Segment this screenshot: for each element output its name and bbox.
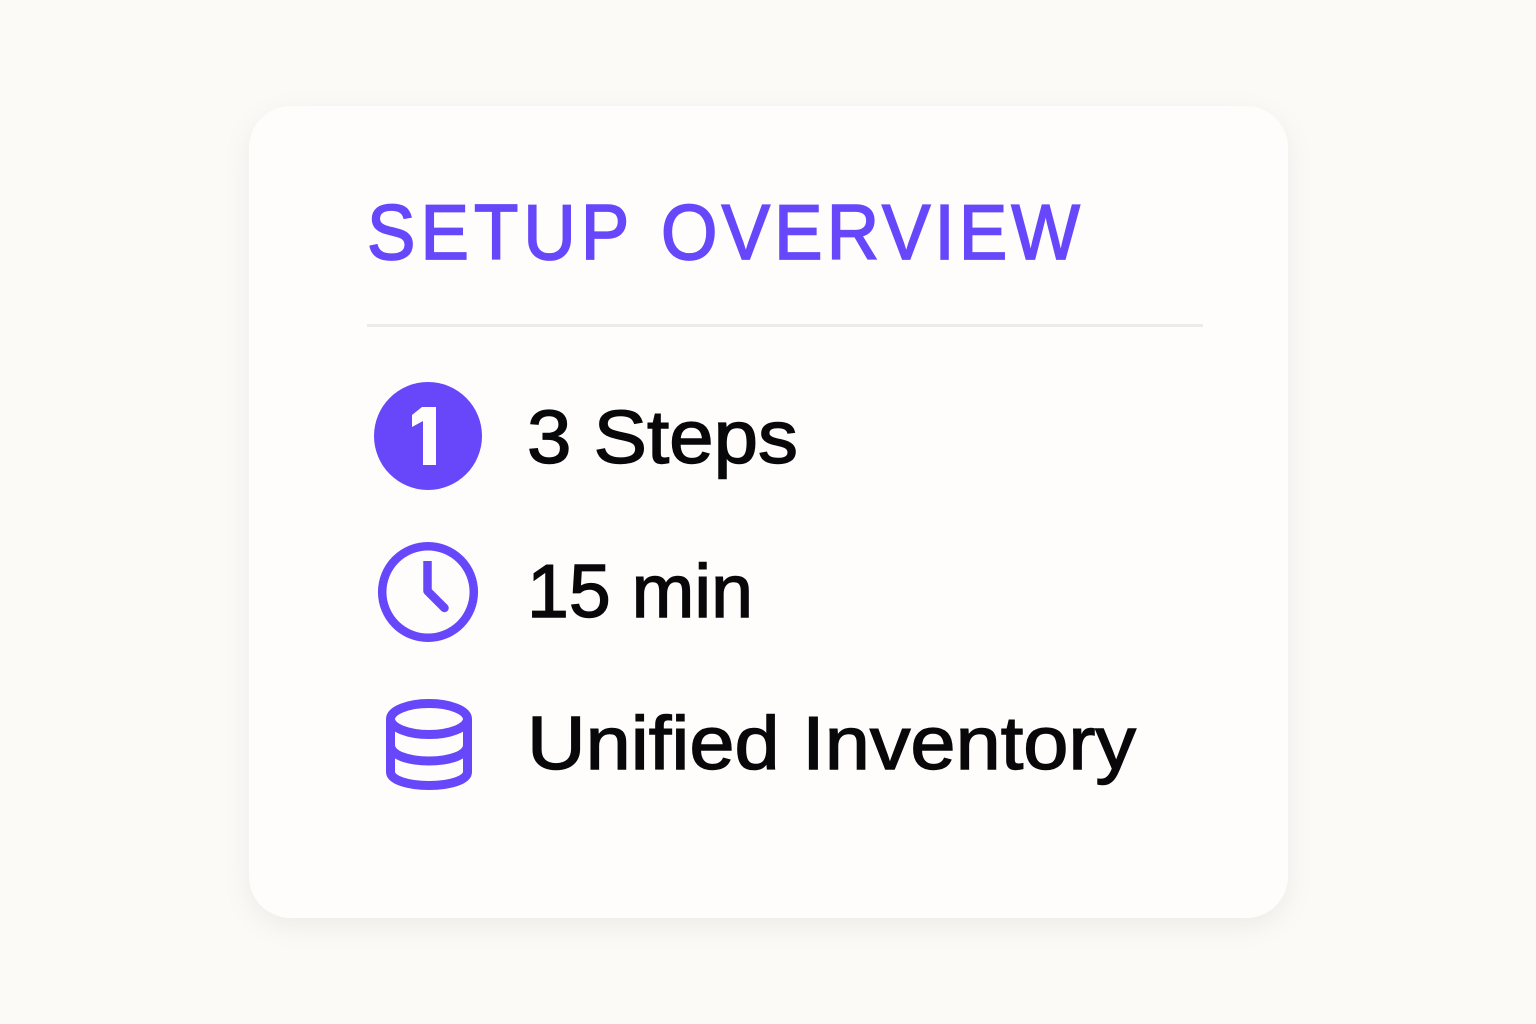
text: 15 min: 15 min [527,549,753,633]
panel: setup overview card [249,106,1288,918]
heading: setup overview [367,189,1084,276]
icon: clock [382,546,474,638]
icon: numbered circle [374,382,482,490]
text: unified inventory: Unified Inventory [527,701,1137,785]
heading: setup overview: OVERVIEW [661,189,1084,276]
icon: database [390,704,468,786]
text: 3 steps: 3 Steps [527,395,798,479]
heading: setup overview: SETUP [367,189,634,276]
